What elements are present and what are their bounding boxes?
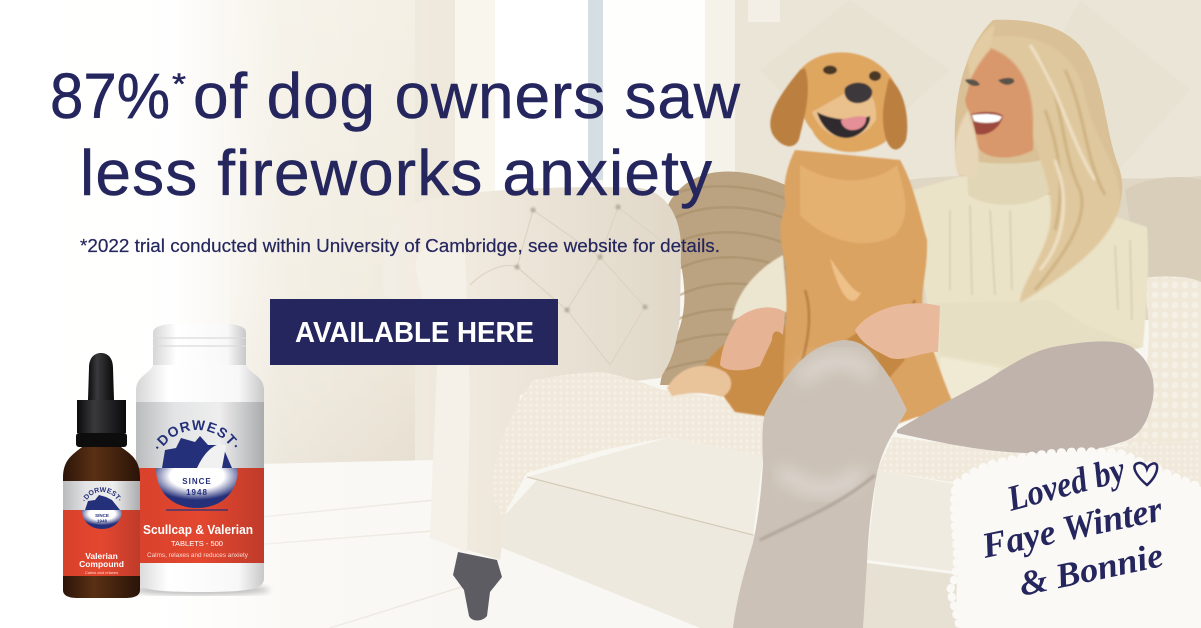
bottle white label	[63, 481, 140, 513]
product: large tablet tub: Calms, relaxes and reduces anxiety	[147, 552, 249, 559]
icon: heart	[1134, 463, 1157, 485]
right leg	[897, 341, 1154, 453]
tub body	[136, 365, 264, 592]
handwritten endorsement: Loved by	[1002, 449, 1130, 519]
headline: less fireworks anxiety	[80, 137, 712, 209]
knit pillow right	[1120, 276, 1201, 450]
dog ears	[770, 68, 808, 146]
woman grey trousers	[733, 340, 1154, 628]
dog nose	[845, 83, 872, 103]
tub logo: 1948	[186, 488, 208, 497]
handwritten endorsement	[977, 449, 1167, 604]
product: large tablet tub	[136, 324, 270, 596]
handwritten endorsement: Faye Winter	[977, 488, 1167, 566]
tub product name: Scullcap & Valerian	[143, 523, 253, 537]
tub logo	[156, 420, 238, 511]
tub silver label	[136, 402, 264, 469]
bottle red label	[63, 510, 140, 576]
woman back hair	[955, 20, 1122, 303]
dropper bulb	[88, 353, 114, 400]
woman sweater	[732, 158, 1148, 400]
knit throw	[492, 372, 767, 517]
product: dropper bottle: Calms and relaxes	[85, 570, 118, 575]
dog mouth	[817, 112, 870, 138]
seat cushion	[527, 437, 763, 535]
cream blanket on seat	[877, 437, 1201, 490]
woman hands	[720, 303, 940, 370]
dog body	[781, 150, 953, 430]
dog tail	[667, 366, 731, 397]
left leg	[733, 340, 907, 628]
bottle logo	[82, 487, 122, 529]
grey sofa leg	[453, 552, 502, 620]
golden retriever dog	[667, 52, 953, 430]
tub lid	[153, 323, 246, 365]
fluffy white blanket	[950, 451, 1201, 628]
woman face	[965, 40, 1035, 158]
product: dropper bottle: Compound	[79, 559, 124, 569]
tub logo: SINCE	[182, 477, 212, 486]
tub logo: ·DORWEST·	[156, 420, 238, 449]
sofa right arm	[1125, 177, 1201, 290]
bottle logo: SINCE	[95, 513, 109, 518]
footnote: *2022 trial conducted within University of Cambridge, see website for details.	[80, 235, 720, 256]
product: large tablet tub: TABLETS - 500	[171, 541, 223, 548]
sofa base	[500, 480, 765, 628]
dog muzzle	[812, 88, 876, 138]
sweater hem	[940, 357, 1000, 400]
headline: of dog owners saw	[193, 60, 741, 132]
bottle glass	[63, 447, 140, 598]
woven jute cushion	[660, 171, 815, 385]
bottle logo: 1948	[97, 518, 108, 524]
tufted sofa arm	[383, 187, 681, 560]
sofa back right	[880, 176, 1201, 320]
bottle product name: Valerian	[85, 551, 118, 561]
dog tongue	[841, 116, 866, 130]
dog haunch	[703, 325, 790, 420]
sofa	[383, 171, 1201, 628]
headline	[50, 60, 741, 209]
woman front hair	[955, 24, 1120, 303]
call to action button: AVAILABLE HERE	[295, 317, 534, 349]
right sleeve and cuff	[937, 300, 1143, 372]
white fade overlay	[0, 0, 470, 628]
dog eyes	[823, 66, 881, 81]
bottle logo: ·DORWEST·	[83, 487, 121, 502]
tub red label	[136, 468, 264, 563]
handwritten endorsement: & Bonnie	[1016, 535, 1166, 604]
front roll of arm	[415, 245, 470, 552]
headline: *	[172, 68, 186, 101]
headline: 87%	[50, 60, 170, 132]
left sleeve	[732, 255, 788, 320]
dropper collar	[77, 400, 126, 433]
product: dropper bottle	[63, 353, 140, 598]
call to action button	[270, 299, 558, 365]
dog head	[799, 52, 899, 152]
tufting seams	[470, 207, 660, 365]
turtleneck	[967, 158, 1052, 205]
